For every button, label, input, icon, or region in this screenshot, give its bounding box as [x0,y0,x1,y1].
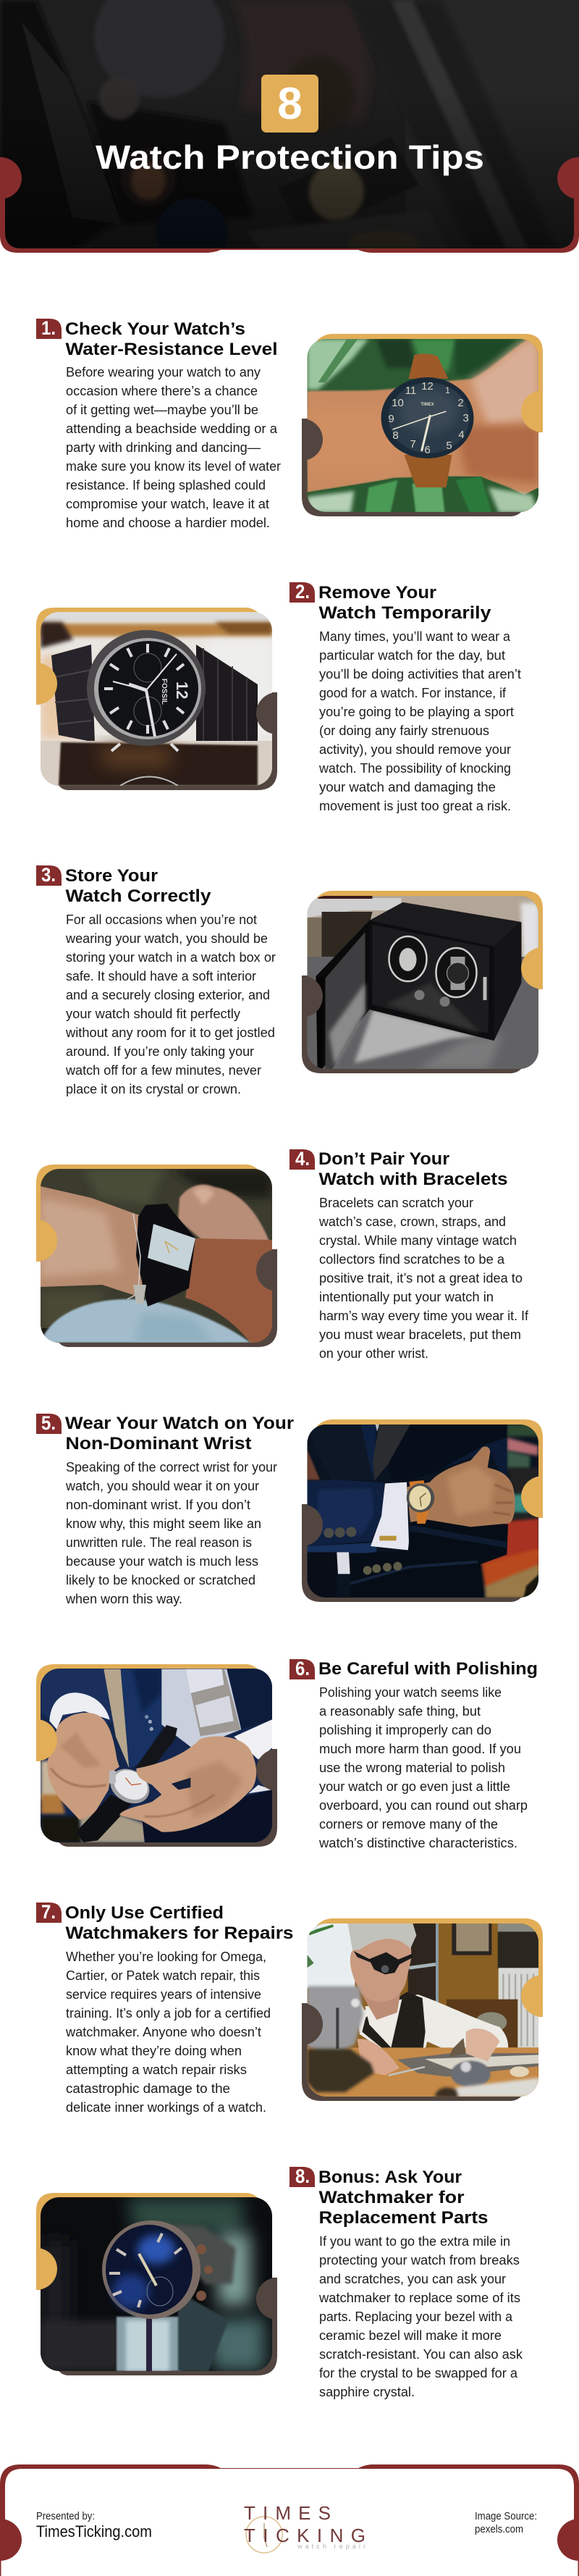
photo: suit cuff and watch [302,1419,543,1602]
tip 3 photo card [302,891,543,1073]
tip 3 body text: wearing your watch, you should be [65,931,268,946]
tip 6 body text [318,1685,528,1850]
image source: Image Source: [475,2510,537,2522]
tip 2 body text: (or doing any fairly strenuous [319,723,489,738]
tip 8 number badge [290,2165,315,2187]
tip 1 heading: Check Your Watch’s [65,319,245,339]
tip 1 number badge [36,317,62,339]
photo: watch on wrist: 8 [392,429,399,442]
tip 6 body text: watch’s distinctive characteristics. [318,1835,517,1850]
tip 2 body text: activity), you should remove your [319,742,511,757]
tip 7 body text: Whether you’re looking for Omega, [66,1949,266,1964]
footer white panel [1,2469,578,2576]
tip 3 body text: safe. It should have a soft interior [66,968,256,983]
tip 7 number badge [36,1901,62,1923]
tip 1 body text: occasion where there’s a chance [66,383,258,398]
tip 2 body text: watch. The possibility of knocking [318,760,511,776]
tip 1 number badge: 1. [41,317,56,339]
number badge 8: 8 [277,79,303,129]
tip 6 photo card [36,1664,277,1847]
tip 7 heading: Only Use Certified [65,1903,224,1923]
tip 8 body text: sapphire crystal. [319,2384,415,2399]
tip 6 number badge: 6. [295,1658,310,1679]
header banner [0,0,579,268]
photo: watch on wrist: 5 [446,440,452,452]
tip 3 body text: around. If you’re only taking your [66,1044,254,1059]
photo: watch on wrist [307,339,538,513]
tip 1 body text: make sure you know its level of water [66,458,281,474]
tip 5 body text: because your watch is much less [66,1553,258,1569]
tip 2 photo card [36,608,277,790]
tip 3 panel [36,864,543,1096]
tip 8 heading: Replacement Parts [318,2208,488,2228]
gold notch [36,1220,57,1262]
tip 3 body text: and a securely closing exterior, and [66,987,270,1002]
tip 7 heading [65,1903,294,1943]
tip 1 photo card [302,334,543,516]
tip 3 body text: For all occasions when you’re not [66,912,257,927]
tip 7 body text: training. It’s only a job for a certified [66,2005,271,2021]
logo: TIMES [244,2502,331,2524]
tip 7 body text: Cartier, or Patek watch repair, this [66,1968,260,1983]
tip 1 body text [66,364,281,530]
tip 1 body text: attending a beachside wedding or a [66,421,278,436]
tip 4 panel [36,1148,529,1361]
tip 4 body text: collectors find scratches to be a [319,1251,505,1267]
tip 3 body text: your watch should fit perfectly [66,1006,241,1021]
photo: watch on wrist: 11 [405,385,416,397]
tip 6 body text: Polishing your watch seems like [319,1685,502,1700]
header background photo [0,0,579,268]
tip 7 body text: catastrophic damage to the [66,2081,230,2096]
brown notch [256,2278,277,2320]
photo: watch winder box [307,896,538,1070]
photo: black chronograph watch: FOSSIL [160,679,168,705]
tip 5 heading [65,1414,294,1453]
number badge 8 [261,75,318,133]
tip 5 body text [65,1459,277,1606]
tip 5 body text: non-dominant wrist. If you don’t [66,1497,250,1512]
header maroon frame [0,157,579,253]
tip 6 body text: much more harm than good. If you [319,1741,521,1756]
tip 4 body text: positive trait, it’s not a great idea to [319,1270,523,1285]
tip 7 heading: Watchmakers for Repairs [65,1923,294,1943]
photo: watch on wrist: 6 [424,444,431,456]
image source: pexels.com [475,2523,523,2535]
tip 3 body text: without any room for it to get jostled [65,1025,275,1040]
brown notch [302,1504,323,1546]
tip 6 body text: your watch or go even just a little [319,1779,510,1794]
tip 2 body text: you’re going to be playing a sport [319,704,514,719]
tip 1 body text: party with drinking and dancing— [66,440,261,455]
title: Watch Protection Tips [96,138,484,176]
tip 4 heading: Watch with Bracelets [318,1170,508,1189]
tip 4 body text: intentionally put your watch in [319,1289,494,1304]
tip 6 body text: polishing it improperly can do [319,1722,491,1737]
tip 3 number badge: 3. [41,864,56,886]
tip 2 body text: your watch and damaging the [319,779,496,794]
tip 7 body text: delicate inner workings of a watch. [66,2099,266,2115]
tip 2 body text: good for a watch. For instance, if [319,685,507,700]
tip 2 body text: Many times, you’ll want to wear a [319,629,511,644]
tip 8 photo card [36,2193,277,2375]
footer notch right [557,2519,579,2561]
tip 4 photo card [36,1165,277,1347]
tip 5 body text: unwritten rule. The real reason is [66,1535,252,1550]
tip 6 body text: use the wrong material to polish [319,1760,505,1775]
tip 7 body text: service requires years of intensive [66,1986,261,2002]
tip 4 body text: on your other wrist. [319,1346,428,1361]
tip 2 body text [318,629,521,813]
tip 6 body text: corners or remove many of the [319,1816,498,1832]
tip 1 heading: Water-Resistance Level [65,340,278,359]
brown notch [256,1249,277,1291]
tip 3 heading: Store Your [65,866,158,886]
photo: watch on wrist: 3 [462,412,469,424]
tip 4 heading [318,1149,508,1189]
tip 8 body text: If you want to go the extra mile in [319,2233,510,2249]
tip 7 body text: attempting a watch repair risks [66,2062,247,2077]
tip 5 panel [36,1412,543,1606]
photo: black chronograph watch: 12 [173,681,191,699]
tip 4 body text: watch’s case, crown, straps, and [318,1214,506,1229]
tip 5 number badge: 5. [41,1412,56,1434]
decorative notch left [0,157,22,199]
tip 3 number badge [36,864,62,886]
gold notch [521,1476,543,1518]
tip 8 heading: Bonus: Ask Your [318,2168,462,2187]
photo: watch on wrist: 9 [388,413,394,425]
gold notch [521,1975,543,2017]
tip 4 body text [318,1195,529,1361]
photo: black chronograph watch [41,612,272,786]
tip 2 heading: Remove Your [318,583,436,603]
brown notch [302,2003,323,2045]
tip 6 body text: a reasonably safe thing, but [319,1703,481,1719]
gold notch [521,947,543,989]
gold notch [36,2248,57,2290]
photo: blue dial chronograph [41,2197,272,2371]
footer [0,2464,579,2576]
presented by [36,2510,152,2541]
tip 1 body text: resistance. If being splashed could [66,477,266,492]
tip 3 body text: storing your watch in a watch box or [66,949,276,965]
tip 8 body text: watchmaker to replace some of its [318,2290,520,2305]
photo: watch on wrist: 10 [392,397,404,409]
tip 8 body text: scratch-resistant. You can also ask [319,2346,523,2362]
photo: watch on wrist: 2 [457,397,464,409]
photo: watchmaker at his bench [302,1918,543,2101]
tip 4 body text: harm’s way every time you wear it. If [319,1308,529,1323]
photo: watch on wrist: 1 [445,385,450,395]
tip 2 panel [36,581,521,813]
tip 8 number badge: 8. [295,2165,310,2187]
tip 4 heading: Don’t Pair Your [318,1149,449,1169]
tip 5 heading: Wear Your Watch on Your [65,1414,294,1433]
tip 6 panel [36,1658,538,1850]
tip 2 number badge: 2. [295,581,310,603]
gold notch [521,390,543,432]
tip 7 number badge: 7. [41,1901,56,1923]
tip 7 body text: know what they’re doing when [66,2043,242,2058]
tip 2 body text: particular watch for the day, but [319,647,505,663]
image source [475,2510,537,2535]
footer maroon frame [0,2464,579,2576]
tip 3 body text: place it on its crystal or crown. [66,1081,241,1096]
photo: wrist with bracelet and watch [41,1169,272,1343]
tip 5 photo card [302,1419,543,1602]
logo [244,2502,365,2553]
tip 1 body text: home and choose a hardier model. [66,515,270,530]
tip 1 body text: of it getting wet—maybe you’ll be [66,402,258,417]
tip 8 panel [36,2165,523,2399]
tip 7 photo card [302,1918,543,2101]
tip 3 heading: Watch Correctly [65,886,211,906]
tip 4 body text: Bracelets can scratch your [319,1195,473,1210]
tip 4 body text: crystal. While many vintage watch [319,1233,517,1248]
tip 2 heading [318,583,491,623]
tip 4 number badge [290,1148,315,1170]
tip 1 panel [36,317,543,530]
brown notch [302,419,323,461]
photo: watch on wrist: 12 [421,380,434,393]
presented by: Presented by: [36,2510,95,2522]
tip 3 heading [65,866,211,906]
photo: watch on wrist: 7 [410,438,416,450]
tip 8 body text: and scratches, you can ask your [319,2271,506,2286]
tip 8 heading: Watchmaker for [318,2188,465,2207]
tip 8 body text [318,2233,523,2399]
tip 3 body text [65,912,276,1096]
tip 7 body text: watchmaker. Anyone who doesn’t [65,2024,261,2039]
tip 2 body text: you’ll be doing activities that aren’t [319,666,521,681]
tip 5 body text: when worn this way. [65,1591,182,1606]
brown notch [256,692,277,734]
tip 5 number badge [36,1412,62,1434]
photo: hands adjusting a watch [36,1664,277,1847]
decorative notch right [557,157,579,199]
footer notch left [0,2519,22,2561]
tip 5 body text: watch, you should wear it on your [65,1478,259,1493]
logo: TICKING [244,2525,365,2546]
brown notch [302,976,323,1018]
tip 8 body text: ceramic bezel will make it more [319,2328,502,2343]
tip 5 body text: know why, this might seem like an [66,1516,261,1531]
tip 7 panel [36,1901,543,2115]
brown notch [256,1749,277,1791]
tip 2 body text: movement is just too great a risk. [319,798,511,813]
tip 4 body text: you must wear bracelets, put them [319,1327,521,1342]
tip 6 body text: overboard, you can round out sharp [319,1797,528,1813]
tip 2 heading: Watch Temporarily [318,603,491,623]
tip 1 body text: Before wearing your watch to any [66,364,261,379]
tip 8 heading [318,2168,488,2228]
tip 8 body text: parts. Replacing your bezel with a [319,2309,513,2324]
tip 5 body text: likely to be knocked or scratched [66,1572,255,1587]
presented by: TimesTicking.com [36,2522,152,2541]
tip 7 body text [65,1949,271,2115]
tip 6 heading: Be Careful with Polishing [318,1659,538,1679]
tip 6 number badge [290,1658,315,1679]
gold notch [36,663,57,705]
tip 2 number badge [290,581,315,603]
gold notch [36,1719,57,1761]
logo: watch repair [297,2543,365,2550]
tip 4 number badge: 4. [295,1148,310,1170]
tip 8 body text: for the crystal to be swapped for a [319,2365,518,2380]
tip 1 body text: compromise your watch, leave it at [66,496,269,511]
tip 1 heading [65,319,278,359]
tip 5 heading: Non-Dominant Wrist [65,1434,252,1453]
photo: watch on wrist: 4 [458,429,465,441]
tip 8 body text: protecting your watch from breaks [319,2252,520,2267]
tip 5 body text: Speaking of the correct wrist for your [66,1459,277,1474]
photo: watch on wrist: TIMEX [420,403,434,407]
tip 3 body text: watch off for a few minutes, never [65,1062,261,1078]
